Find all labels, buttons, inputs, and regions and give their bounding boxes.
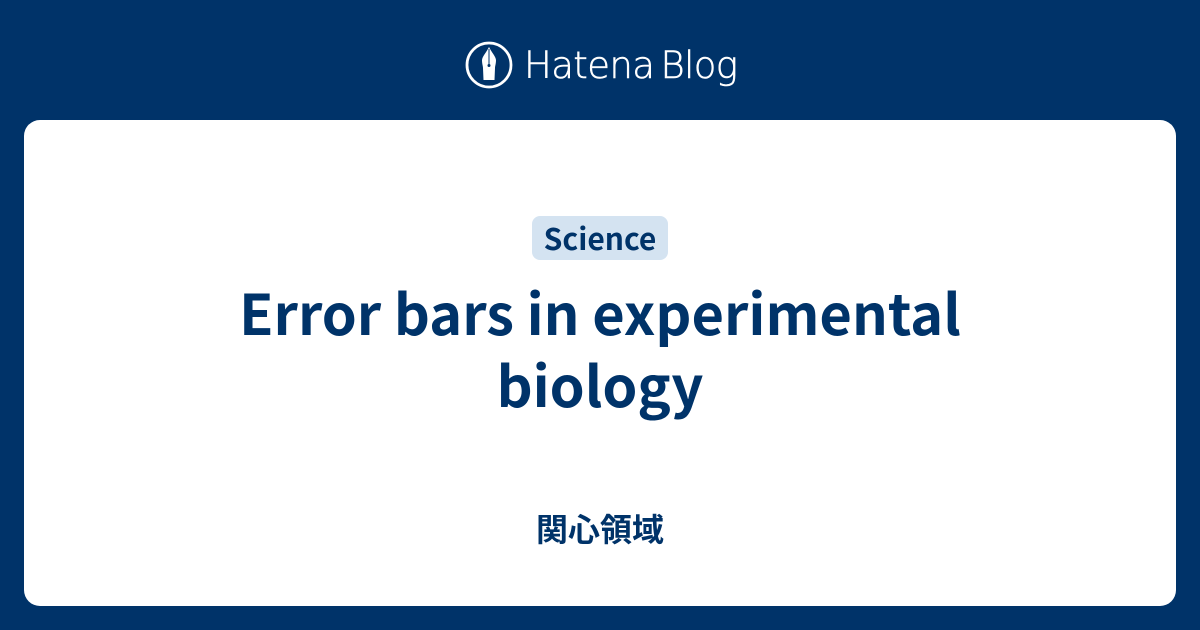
- title: biology: [497, 343, 703, 424]
- title: [239, 271, 961, 424]
- blog name: 関心領域: [536, 505, 664, 551]
- logo: Hatena Blog: [466, 42, 512, 88]
- title: Error bars in experimental: [239, 271, 961, 352]
- icon: fountain pen nib in circle: [466, 42, 512, 88]
- category tag: Science: [544, 215, 656, 259]
- logo wordmark: Hatena Blog: [524, 44, 737, 87]
- panel: white card: [24, 120, 1176, 606]
